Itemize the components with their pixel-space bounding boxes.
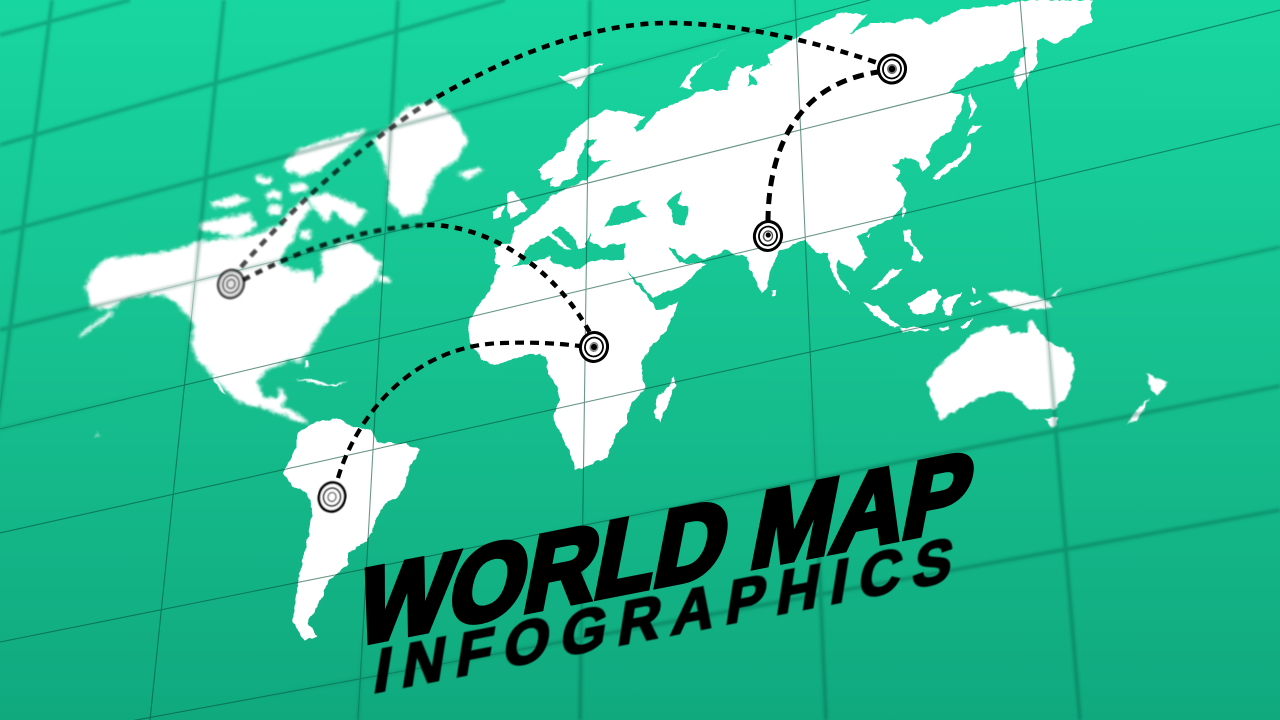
- heading: WORLD MAP: WORLD MAP: [348, 428, 983, 668]
- Oceania: [927, 288, 1168, 428]
- location pin: Africa: [577, 330, 611, 364]
- dashed route: North America to Africa: [243, 225, 590, 333]
- South America: [283, 418, 420, 640]
- location pin: India: [751, 219, 785, 253]
- European and Arctic islands: [493, 47, 730, 220]
- world map: [78, 0, 1168, 640]
- dashed route: India to Russia: [768, 72, 878, 222]
- location pin: Russia: [875, 52, 909, 86]
- Eurasia: [495, 0, 1093, 298]
- location pin: South America: [316, 480, 348, 514]
- Central America islands and Baja: [212, 360, 347, 395]
- North America and Arctic islands: [78, 100, 483, 436]
- Asian and Pacific islands: [771, 93, 982, 332]
- dashed route: South America to Africa: [338, 343, 580, 478]
- Madagascar: [654, 377, 676, 422]
- title: [348, 428, 983, 706]
- location pin: North America: [214, 267, 248, 301]
- dashed route: North America to Russia: [241, 23, 878, 267]
- Africa: [468, 257, 678, 470]
- subheading: INFOGRAPHICS: INFOGRAPHICS: [370, 525, 958, 706]
